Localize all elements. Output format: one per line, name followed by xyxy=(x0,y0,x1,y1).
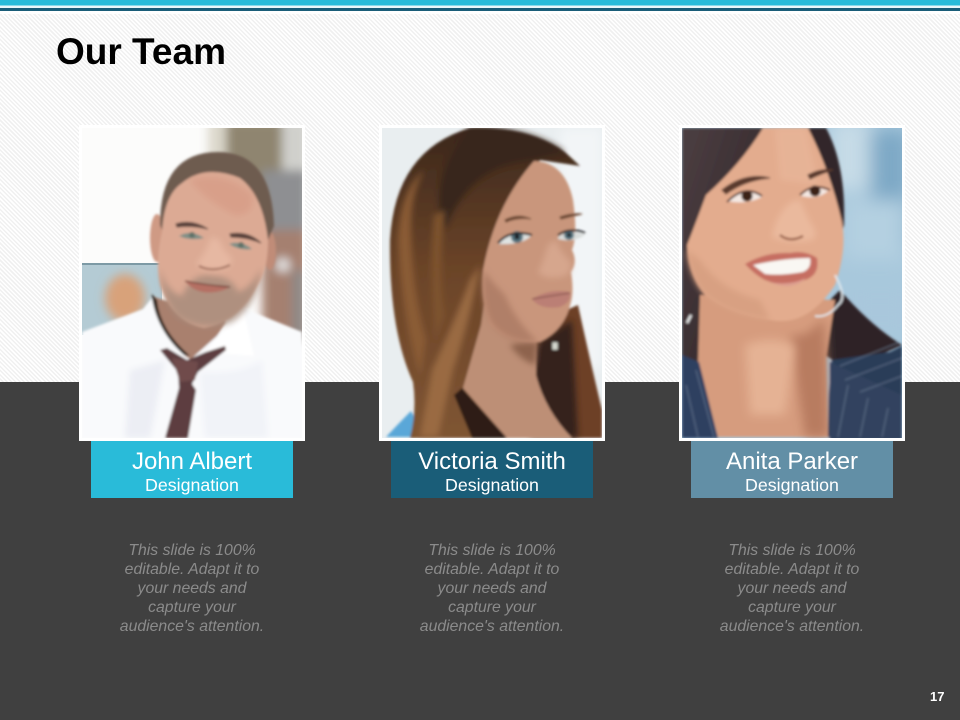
ears xyxy=(150,214,164,262)
face xyxy=(158,172,268,328)
description: Anita Parker xyxy=(720,542,864,635)
mouth xyxy=(185,281,230,292)
description: John Albert: This slide is 100% xyxy=(128,542,256,559)
title: Our Team xyxy=(56,31,226,72)
hair xyxy=(160,152,274,240)
description: John Albert: editable. Adapt it to xyxy=(125,561,259,578)
name plate: Anita Parker: Anita Parker xyxy=(726,448,858,475)
name plate: John Albert xyxy=(91,441,293,498)
dark lower panel xyxy=(0,382,960,720)
description: Victoria Smith: audience's attention. xyxy=(420,618,564,635)
neck xyxy=(462,290,572,438)
description: Victoria Smith xyxy=(420,542,564,635)
back hair xyxy=(682,128,763,375)
tie xyxy=(160,346,226,438)
eyes xyxy=(499,234,531,244)
name plate: John Albert: Designation xyxy=(145,475,239,495)
eyebrows xyxy=(722,176,770,194)
shirt xyxy=(82,298,302,438)
back hair xyxy=(520,305,602,438)
nose xyxy=(538,240,571,278)
description: John Albert xyxy=(120,542,264,635)
eyes xyxy=(727,192,762,202)
team member photo: Anita Parker xyxy=(679,125,905,441)
top bars xyxy=(0,0,960,11)
name plate: Anita Parker: Designation xyxy=(745,475,839,495)
main hair xyxy=(390,128,580,438)
page number: 17 xyxy=(930,689,944,704)
name plate: Victoria Smith xyxy=(391,441,593,498)
patterned upper background xyxy=(0,14,960,382)
description: Victoria Smith: capture your xyxy=(448,599,536,616)
name plate: Victoria Smith: Victoria Smith xyxy=(418,448,566,475)
eyebrows xyxy=(505,216,531,222)
description: Victoria Smith: This slide is 100% xyxy=(428,542,556,559)
earrings xyxy=(815,275,842,316)
eyebrows xyxy=(176,222,208,229)
description: John Albert: capture your xyxy=(148,599,236,616)
description: Anita Parker: audience's attention. xyxy=(720,618,864,635)
name plate: John Albert: John Albert xyxy=(132,448,252,475)
team member photo: Victoria Smith xyxy=(379,125,605,441)
description: Victoria Smith: editable. Adapt it to xyxy=(425,561,559,578)
face xyxy=(482,161,575,342)
description: Anita Parker: editable. Adapt it to xyxy=(725,561,859,578)
nose xyxy=(197,237,232,270)
name plate: Anita Parker xyxy=(691,441,893,498)
eyes xyxy=(179,233,204,239)
description: Anita Parker: capture your xyxy=(748,599,836,616)
earring xyxy=(552,342,558,350)
nose xyxy=(772,200,816,242)
blue top xyxy=(386,411,425,437)
description: Anita Parker: your needs and xyxy=(738,580,846,597)
description: John Albert: your needs and xyxy=(138,580,246,597)
description: John Albert: audience's attention. xyxy=(120,618,264,635)
team member photo: John Albert xyxy=(79,125,305,441)
name plate: Victoria Smith: Designation xyxy=(445,475,539,495)
neck xyxy=(152,296,226,362)
mouth xyxy=(745,252,818,284)
neck xyxy=(698,295,835,437)
lips xyxy=(532,291,570,308)
description: Victoria Smith: your needs and xyxy=(438,580,546,597)
face xyxy=(687,128,843,321)
description: Anita Parker: This slide is 100% xyxy=(728,542,856,559)
blazer xyxy=(682,355,718,438)
